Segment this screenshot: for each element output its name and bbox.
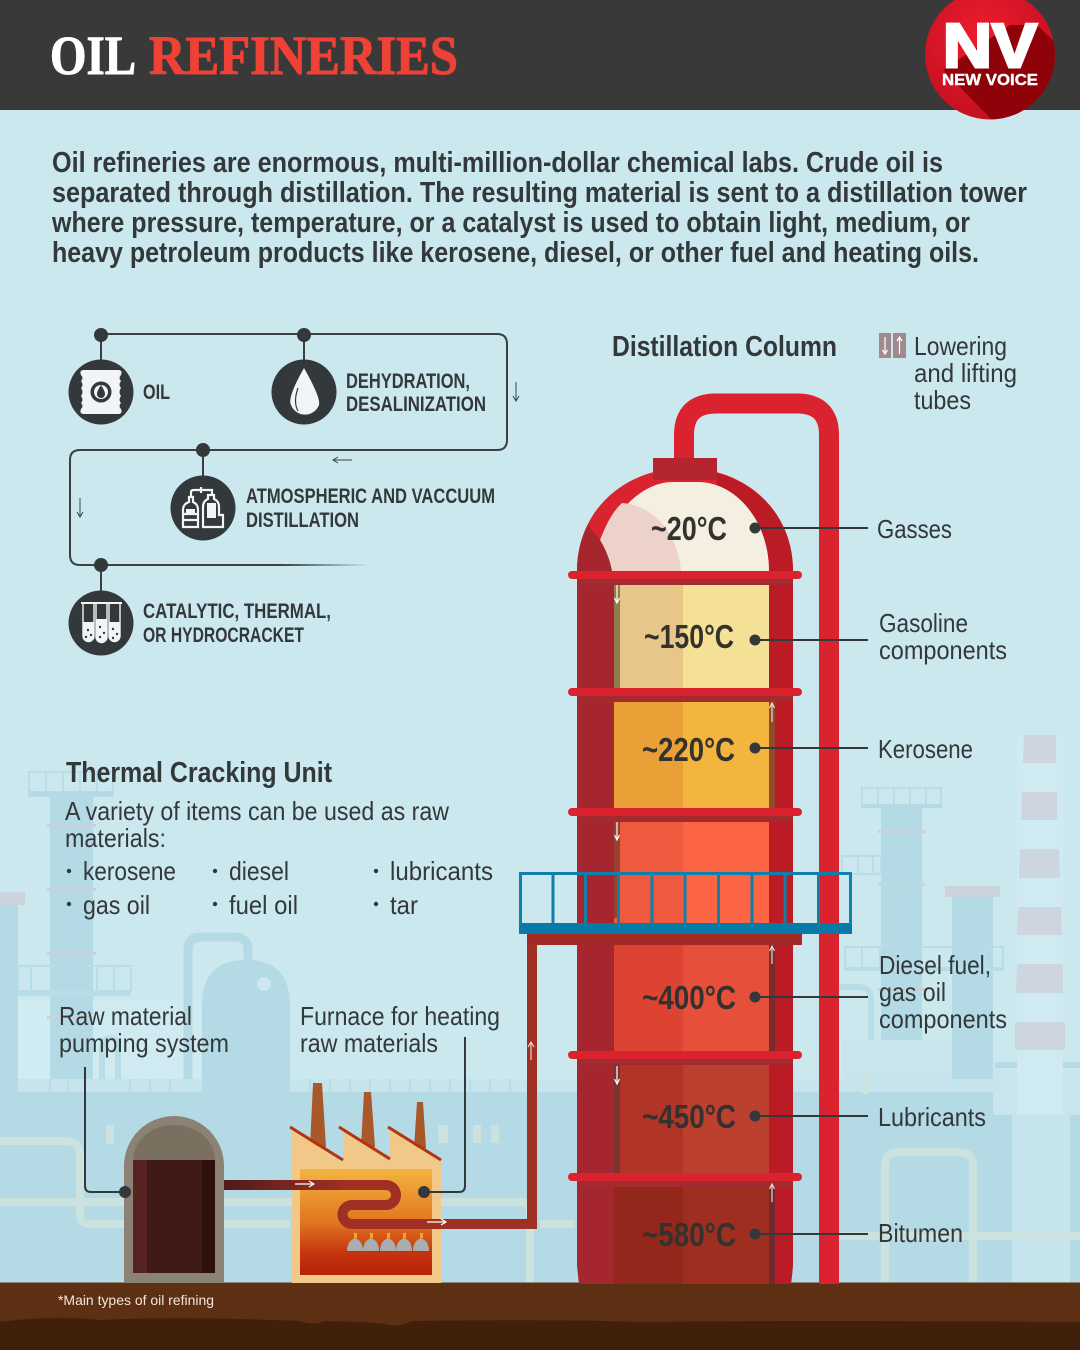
label: raw material pumping system — [59, 1001, 229, 1058]
label: gasoline components — [879, 608, 1007, 665]
overhead red pipe — [684, 404, 829, 1284]
column rings — [527, 571, 802, 1187]
icon: distillation tanks — [170, 476, 236, 540]
background refinery skyline — [0, 735, 1080, 1283]
label: oil: OIL — [143, 381, 170, 404]
label: cracking: OR HYDROCRACKET — [143, 624, 304, 647]
temperatures: ~450°C — [642, 1098, 736, 1135]
label: lubricants: Lubricants — [878, 1102, 986, 1132]
temperatures — [642, 510, 736, 1253]
label: furnace: Furnace for heating — [300, 1001, 500, 1031]
logo: NV New Voice: NV — [943, 12, 1037, 81]
process flow diagram — [68, 328, 519, 656]
footnote: *Main types of oil refining — [58, 1292, 214, 1308]
icon: water drop — [272, 360, 336, 424]
logo: NV New Voice — [925, 0, 1055, 120]
arrow: flow down right — [513, 382, 519, 401]
label: diesel fuel — [879, 950, 1007, 1034]
text block: raw materials: gas oil — [83, 890, 150, 920]
section: gasoline 150 — [614, 585, 769, 688]
label: diesel fuel: components — [879, 1004, 1007, 1034]
label: cracking: CATALYTIC, THERMAL, — [143, 600, 331, 623]
arrow: pipe in — [295, 1181, 314, 1187]
label: raw material pumping system: pumping system — [59, 1028, 229, 1058]
intro text — [51, 147, 1027, 269]
legend: lowering and lifting tubes: Lowering — [914, 331, 1007, 361]
text block: raw materials: materials: — [65, 823, 166, 853]
text block: raw materials: lubricants — [390, 856, 493, 886]
label: gasoline components: components — [879, 635, 1007, 665]
header bar — [0, 0, 1080, 110]
heading: thermal cracking unit: Thermal Cracking Unit — [66, 757, 332, 789]
label: gasses: Gasses — [877, 514, 952, 544]
temperatures: ~400°C — [642, 979, 736, 1016]
label: dehydration: DESALINIZATION — [346, 393, 486, 416]
section: diesel 400 — [614, 945, 775, 1051]
furnace factory — [290, 1083, 441, 1283]
label: furnace: raw materials — [300, 1028, 438, 1058]
pump tank — [124, 1116, 224, 1283]
text block: raw materials: fuel oil — [229, 890, 298, 920]
intro text: Oil refineries are enormous, multi-million-dollar chemical labs. Crude oil is — [52, 147, 943, 179]
temperatures: ~220°C — [642, 731, 735, 768]
label: kerosene: Kerosene — [878, 734, 973, 764]
arrow: pipe up — [528, 1042, 534, 1060]
temperatures: ~580°C — [642, 1216, 736, 1253]
label: furnace — [300, 1001, 500, 1058]
arrow: flow down left — [77, 498, 83, 517]
label: bitumen: Bitumen — [878, 1218, 963, 1248]
title: OIL — [50, 25, 136, 86]
dome — [577, 458, 793, 571]
column body — [577, 570, 793, 1284]
label: diesel fuel: gas oil — [879, 977, 946, 1007]
label: distillation — [246, 485, 495, 532]
section: lubricants 450 — [614, 1065, 769, 1173]
title: REFINERIES — [149, 25, 458, 86]
legend: lowering and lifting tubes: tubes — [914, 385, 971, 415]
label: cracking — [143, 600, 331, 647]
temperatures: ~150°C — [644, 618, 734, 655]
logo: NV New Voice: NEW VOICE — [942, 72, 1038, 89]
arrow: pipe out — [427, 1219, 446, 1225]
label: distillation: DISTILLATION — [246, 509, 359, 532]
label: dehydration — [346, 370, 486, 416]
distillation column — [519, 458, 852, 1284]
text block: raw materials: A variety of items can be used as raw — [65, 796, 449, 826]
text block: raw materials: tar — [390, 890, 418, 920]
leader lines: column outputs — [750, 522, 868, 1240]
label: dehydration: DEHYDRATION, — [346, 370, 470, 393]
icon: test tubes — [68, 590, 134, 656]
label: raw material pumping system: Raw material — [59, 1001, 192, 1031]
label: distillation: ATMOSPHERIC AND VACCUUM — [246, 485, 495, 508]
text block: raw materials: kerosene — [83, 856, 176, 886]
platform railing — [519, 874, 852, 934]
text block: raw materials — [65, 796, 493, 920]
ground — [0, 1282, 1080, 1350]
section: bitumen 580 — [614, 1187, 775, 1284]
arrow: flow left — [333, 457, 352, 463]
heading: distillation column: Distillation Column — [612, 331, 837, 363]
temperatures: ~20°C — [651, 510, 727, 547]
section: kerosene 220 — [614, 702, 775, 808]
label: gasoline components: Gasoline — [879, 608, 968, 638]
legend: lowering and lifting tubes: and lifting — [914, 358, 1017, 388]
legend: lowering and lifting tubes — [879, 331, 1017, 415]
section: middle — [614, 822, 769, 923]
lowering and lifting tube arrows — [614, 585, 774, 1202]
label: diesel fuel: Diesel fuel, — [879, 950, 991, 980]
leader lines: pump and furnace — [85, 1037, 465, 1198]
overhead pipe front segment — [819, 934, 839, 1284]
text block: raw materials: diesel — [229, 856, 289, 886]
pipe: furnace coil to column — [224, 936, 534, 1225]
icon: oil barrel — [68, 360, 134, 424]
